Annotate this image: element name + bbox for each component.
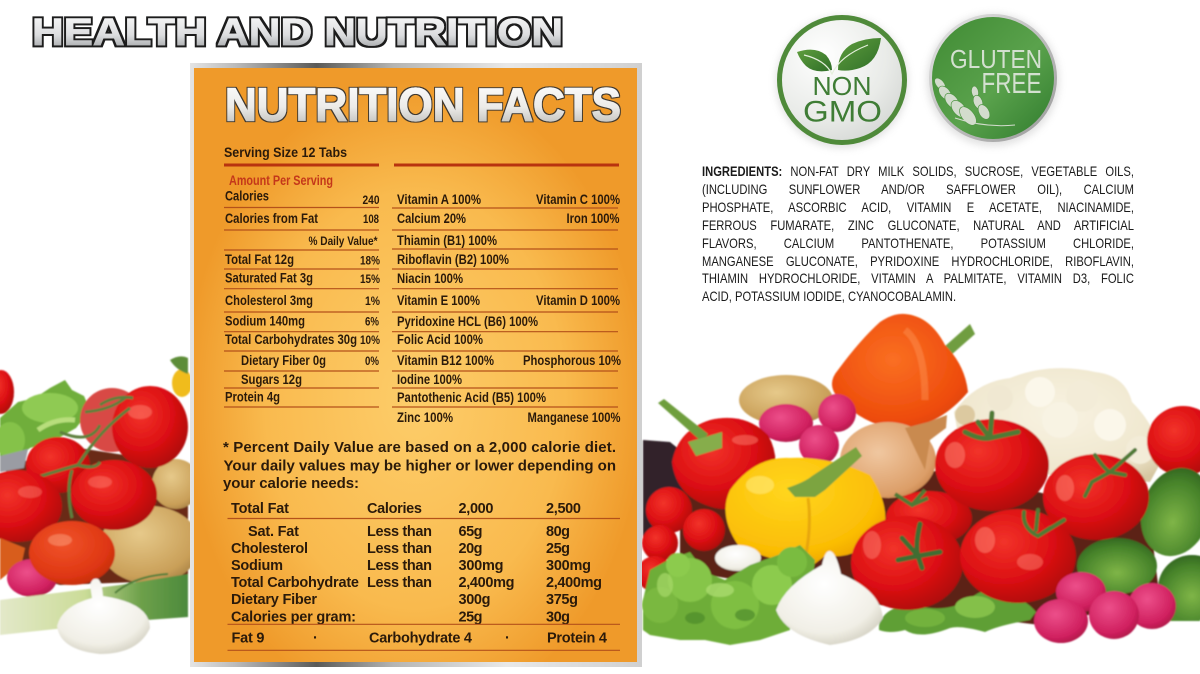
left nutrition list: Total Carbohydrates 30g <box>225 332 357 347</box>
right vitamin list: Zinc 100% <box>397 410 453 425</box>
left nutrition list: Saturated Fat 3g <box>225 270 313 286</box>
cauliflower <box>954 368 1161 482</box>
eggplant <box>643 440 690 540</box>
daily value table: · <box>313 630 318 646</box>
potato small <box>152 459 200 509</box>
shadow backing <box>6 445 188 585</box>
daily value table: Total Carbohydrate <box>231 575 359 591</box>
red divider lines <box>224 164 619 166</box>
leek <box>0 574 188 635</box>
right vitamin list: Niacin 100% <box>397 271 463 286</box>
badge: non gmo: NON <box>812 71 872 101</box>
right vitamin list: Vitamin D 100% <box>536 293 620 308</box>
cherry tomatoes <box>637 487 725 592</box>
potato large <box>100 506 200 584</box>
right vitamin list: Thiamin (B1) 100% <box>397 233 497 248</box>
badge: non gmo <box>776 16 908 148</box>
left nutrition list: Calories from Fat <box>225 211 318 226</box>
daily value table: 2,400mg <box>546 575 602 591</box>
right vitamin list: Vitamin C 100% <box>536 192 620 207</box>
serving size: Serving Size 12 Tabs <box>224 145 347 160</box>
footnote text <box>223 439 616 492</box>
tomato <box>26 437 90 493</box>
tomato A <box>935 413 1049 511</box>
right vitamin list: Riboflavin (B2) 100% <box>397 252 509 267</box>
tomato B <box>1043 450 1149 540</box>
footnote text: Your daily values may be higher or lower depending on <box>224 458 616 474</box>
daily value table: Protein 4 <box>547 630 607 646</box>
left nutrition list: 108 <box>363 214 380 226</box>
ingredients text block: INGREDIENTS: NON-FAT DRY MILK SOLIDS, SUCROSE, VEGETABLE OILS, <box>702 163 1134 179</box>
right vitamin list: Manganese 100% <box>528 410 620 425</box>
radish <box>7 559 57 597</box>
lettuce main <box>642 545 815 645</box>
daily value table: Fat 9 <box>232 630 264 646</box>
left nutrition list: Sodium 140mg <box>225 314 305 328</box>
left nutrition list: 0% <box>365 356 379 368</box>
daily value table: Less than <box>367 558 432 574</box>
orange pepper <box>832 314 975 428</box>
badge: non gmo: GMO <box>803 96 882 128</box>
carrot <box>0 538 25 580</box>
badge: gluten free: GLUTEN <box>950 44 1042 74</box>
daily value table: 300mg <box>546 558 591 574</box>
daily value table: Dietary Fiber <box>231 592 317 608</box>
garlic main <box>776 551 883 645</box>
red pepper <box>658 399 776 509</box>
left nutrition list: % Daily Value* <box>308 236 378 248</box>
tomato D <box>960 509 1076 603</box>
heading: nutrition facts: NUTRITION FACTS <box>225 78 621 130</box>
daily value table: Sodium <box>231 558 283 574</box>
yellow pepper piece <box>170 356 192 397</box>
left nutrition list: Cholesterol 3mg <box>225 293 313 308</box>
tomato top left <box>0 370 14 414</box>
daily value table: Less than <box>367 575 432 591</box>
daily value table: Sat. Fat <box>248 524 299 540</box>
ingredients text block: ACID, POTASSIUM IODIDE, CYANOCOBALAMIN. <box>702 288 956 304</box>
right vitamin list: Calcium 20% <box>397 211 466 226</box>
daily value table: 300mg <box>458 558 504 574</box>
daily value table: 80g <box>546 524 570 540</box>
ingredients text block: FLAVORS, CALCIUM PANTOTHENATE, POTASSIUM CHLORIDE, <box>702 235 1134 251</box>
left nutrition list <box>224 188 380 407</box>
lettuce left <box>0 380 90 462</box>
vegetables: right group <box>637 314 1200 645</box>
tomato orange <box>29 521 115 585</box>
tomato C <box>851 516 963 610</box>
back tomato <box>80 388 144 452</box>
right vitamin list: Pyridoxine HCL (B6) 100% <box>397 314 538 329</box>
right vitamin list: Vitamin A 100% <box>397 192 481 207</box>
daily value table: 2,000 <box>458 501 494 517</box>
icon: leaves <box>797 38 881 74</box>
daily value table: Less than <box>367 541 432 557</box>
panel: nutrition facts <box>190 63 642 667</box>
onion <box>840 415 947 498</box>
ingredients text block: MANGANESE GLUCONATE, PYRIDOXINE HYDROCHLORIDE, RIBOFLAVIN, <box>702 253 1134 269</box>
radishes upper <box>759 394 856 465</box>
ingredients text block: PHOSPHATE, ASCORBIC ACID, VITAMIN E ACETATE, NIACINAMIDE, <box>702 199 1134 215</box>
left nutrition list: 6% <box>365 316 379 328</box>
vine <box>35 397 133 518</box>
left nutrition list: 15% <box>360 274 380 286</box>
tomato center <box>71 460 157 530</box>
daily value table: · <box>505 630 510 646</box>
tomato far right <box>1147 406 1200 476</box>
ingredients text block <box>702 163 1134 304</box>
panel orange background <box>194 68 637 662</box>
right vitamin list: Vitamin B12 100% <box>397 353 494 368</box>
icon: wheat <box>932 76 1015 128</box>
yellow pepper <box>726 447 885 566</box>
shadow backing <box>680 470 1160 625</box>
left nutrition list: Dietary Fiber 0g <box>241 353 326 368</box>
panel rim <box>190 63 642 667</box>
daily value table: Cholesterol <box>231 541 308 557</box>
daily value table: 2,500 <box>546 501 581 517</box>
ingredients text block: FERROUS FUMARATE, ZINC GLUCONATE, NATURAL AND ARTIFICIAL <box>702 217 1134 233</box>
daily value table: 375g <box>546 592 578 608</box>
cucumbers <box>1077 459 1200 621</box>
daily value table: Calories <box>367 501 422 517</box>
daily value table: Total Fat <box>231 501 289 517</box>
daily value table: Calories per gram: <box>231 610 356 626</box>
daily value table: 30g <box>546 610 570 626</box>
footnote text: * Percent Daily Value are based on a 2,000 calorie diet. <box>223 439 616 456</box>
right vitamin list: Pantothenic Acid (B5) 100% <box>397 390 546 405</box>
plate <box>0 449 28 472</box>
right vitamin list: Iodine 100% <box>397 372 462 387</box>
left nutrition list: Sugars 12g <box>241 372 302 387</box>
badge: gluten free: FREE <box>982 68 1042 100</box>
vegetables: left group <box>0 356 200 654</box>
left nutrition list: 240 <box>362 195 380 207</box>
left nutrition list: Protein 4g <box>225 390 280 404</box>
small garlic <box>715 545 761 571</box>
tomato large top <box>112 386 188 468</box>
amount per serving: Amount Per Serving <box>229 173 333 188</box>
ingredients text block: (INCLUDING SUNFLOWER AND/OR SAFFLOWER OIL), CALCIUM <box>702 181 1134 197</box>
daily value table: 2,400mg <box>458 575 514 591</box>
left nutrition list: 10% <box>360 335 380 347</box>
daily value table <box>228 501 620 650</box>
daily value table: 25g <box>458 610 482 626</box>
title: health and nutrition: HEALTH AND NUTRITION <box>32 12 563 54</box>
left nutrition list: 18% <box>360 256 380 268</box>
potato <box>739 375 833 425</box>
right vitamin list: Vitamin E 100% <box>397 293 480 308</box>
right vitamin list: Iron 100% <box>566 211 620 226</box>
daily value table: 20g <box>458 541 482 557</box>
right vitamin list: Phosphorous 10% <box>523 353 621 368</box>
tomato back <box>886 490 972 545</box>
garlic <box>57 579 150 654</box>
daily value table: 300g <box>458 592 490 608</box>
ingredients text block: THIAMIN HYDROCHLORIDE, VITAMIN A PALMITATE, VITAMIN D3, FOLIC <box>702 270 1134 286</box>
right vitamin list <box>392 192 621 425</box>
badge: gluten free <box>927 14 1059 146</box>
daily value table: 65g <box>458 524 482 540</box>
daily value table: Less than <box>367 524 432 540</box>
left nutrition list: Total Fat 12g <box>225 252 294 267</box>
right vitamin list: Folic Acid 100% <box>397 332 483 347</box>
left nutrition list: 1% <box>365 296 380 308</box>
lettuce bottom <box>879 590 1036 635</box>
footnote text: your calorie needs: <box>223 475 359 492</box>
daily value table: 25g <box>546 541 570 557</box>
left nutrition list: Calories <box>225 188 269 204</box>
daily value table: Carbohydrate 4 <box>369 630 472 646</box>
radishes lower <box>1034 572 1176 643</box>
tomato left <box>0 470 62 542</box>
